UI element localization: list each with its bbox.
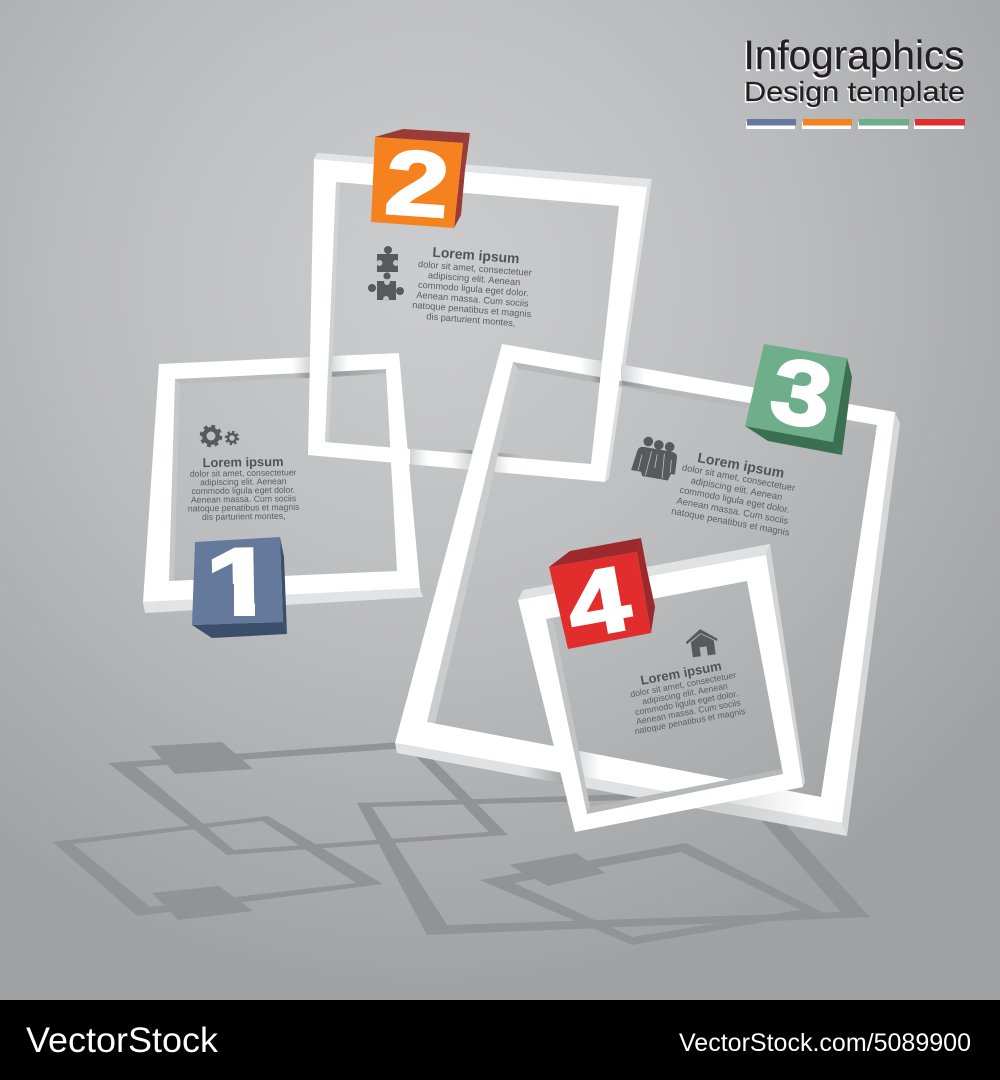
text: block 4: natoque penatibus et magnis <box>634 706 747 736</box>
text: block 3: dolor sit amet, consectetuer <box>681 462 796 493</box>
cube 2 <box>371 129 470 237</box>
text: block 1: commodo ligula eget dolor. <box>191 485 295 496</box>
text: block 1: Lorem ipsum <box>202 454 284 470</box>
text: block 4: Aenean massa. Cum sociis <box>635 697 742 727</box>
text: block 1: natoque penatibus et magnis <box>188 502 300 513</box>
text: block 1: dolor sit amet, consectetuer <box>190 467 297 479</box>
text: block 2: adipiscing elit. Aenean <box>428 270 521 287</box>
text: block 2 <box>411 242 536 329</box>
text: block 3: commodo ligula eget dolor. <box>679 485 790 515</box>
text: block 2: dis parturient montes, <box>426 311 516 328</box>
panel: frame 3 <box>395 344 900 836</box>
panel: frame 2 <box>308 153 652 482</box>
text: block 3: Aenean massa. Cum sociis <box>676 496 789 526</box>
cube 3 <box>745 338 852 455</box>
frame 2 right bar crossing over frame 3 <box>598 355 623 395</box>
text: block 4 <box>624 655 747 736</box>
title: Infographics <box>742 34 964 80</box>
text: block 3: Lorem ipsum <box>696 449 786 481</box>
text: block 1: Aenean massa. Cum sociis <box>191 493 297 505</box>
cube 3: 3 <box>764 338 839 448</box>
text: block 4: Lorem ipsum <box>639 658 723 688</box>
title: Design template <box>742 78 964 108</box>
text: block 2: dolor sit amet, consectetuer <box>418 259 532 278</box>
text: block 2: natoque penatibus et magnis <box>412 300 532 319</box>
colour legend bars <box>746 119 965 129</box>
title <box>742 32 965 108</box>
text: block 2: commodo ligula eget dolor. <box>418 280 529 298</box>
title: Infographics <box>744 32 964 78</box>
icon: people <box>630 435 681 482</box>
icon: puzzle pieces <box>368 246 404 302</box>
text: block 4: commodo ligula eget dolor. <box>634 688 739 717</box>
text: block 4: dolor sit amet, consectetuer <box>629 670 737 699</box>
text: block 2: Lorem ipsum <box>432 244 520 266</box>
footer bar: VectorStock.com/5089900 <box>679 1029 971 1057</box>
floor shadows <box>53 741 870 945</box>
cube 4 <box>549 538 655 658</box>
text: block 4: adipiscing elit. Aenean <box>641 681 729 706</box>
cube 2: 2 <box>382 131 452 237</box>
text: block 2: Aenean massa. Cum sociis <box>416 290 529 309</box>
text: block 3 <box>671 446 802 538</box>
text: block 3: adipiscing elit. Aenean <box>690 475 783 502</box>
panel: frame 1 <box>143 353 423 613</box>
frame 1 right bar crossing over frame 2 <box>390 436 410 476</box>
text: block 1: dis parturient montes, <box>202 511 286 522</box>
icon: gears <box>201 426 238 446</box>
footer bar <box>0 1000 1000 1080</box>
title: Design template <box>744 76 965 107</box>
footer bar: VectorStock <box>26 1021 219 1060</box>
icon: house <box>684 627 720 658</box>
text: block 1 <box>187 454 300 522</box>
panel: frame 4 <box>518 544 805 832</box>
text: block 1: adipiscing elit. Aenean <box>200 476 287 487</box>
cube 1: 1 <box>205 527 276 636</box>
text: block 3: natoque penatibus et magnis <box>671 506 791 538</box>
cube 4: 4 <box>560 547 638 658</box>
